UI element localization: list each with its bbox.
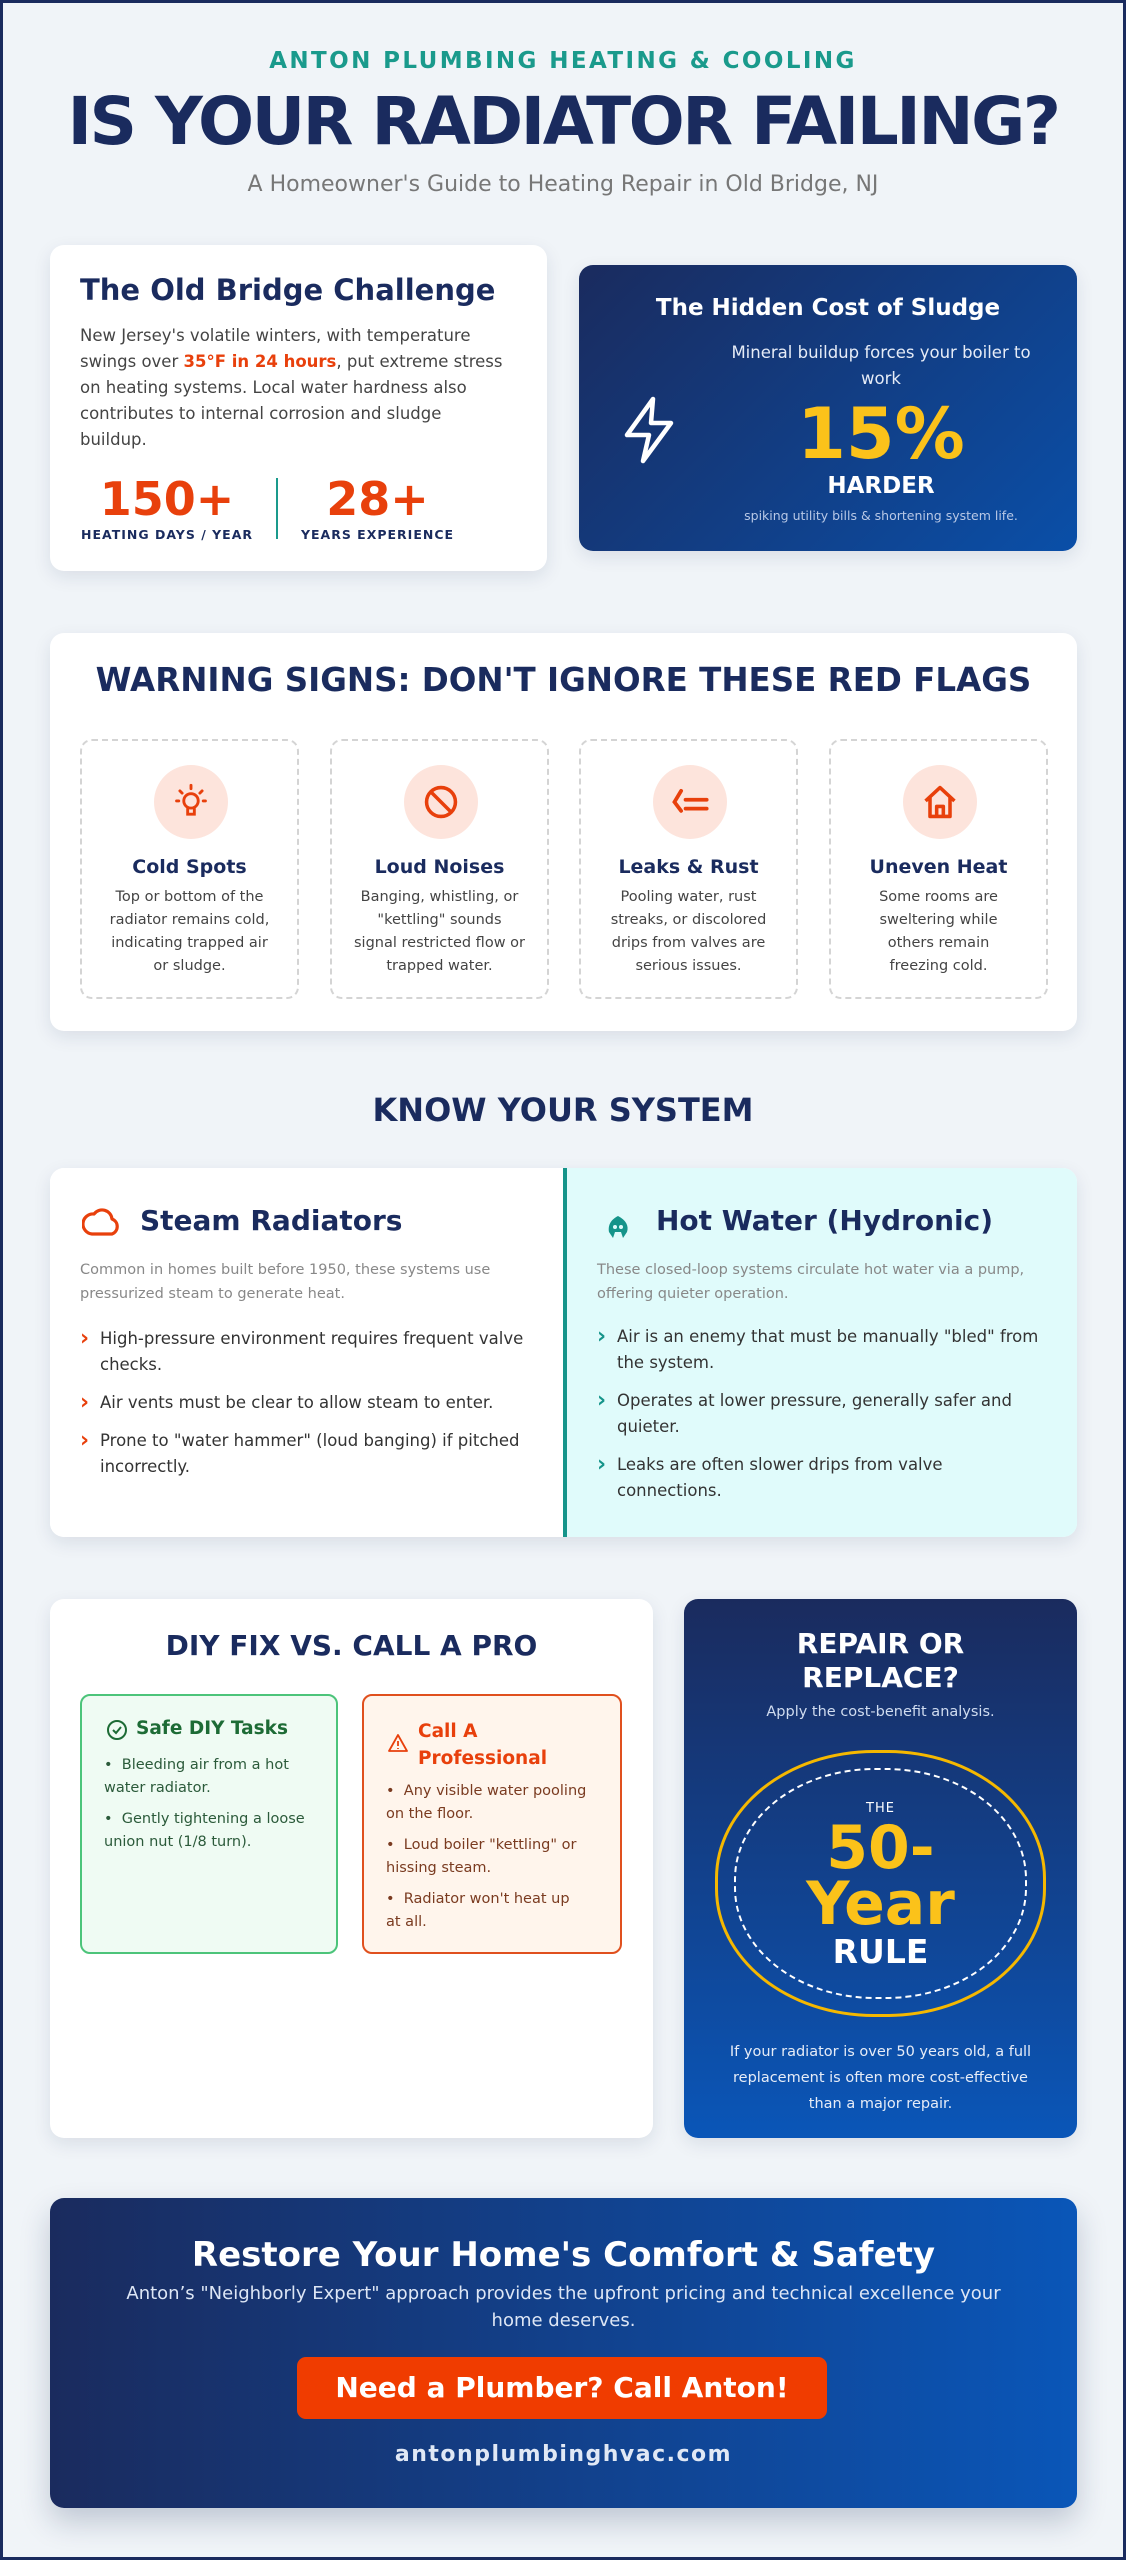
stat text: Mineral buildup forces your boiler to work xyxy=(731,343,1031,388)
sign: loud noises: Banging, whistling, or "kettling" sounds signal restricted flow or trapped water. xyxy=(354,889,525,974)
list xyxy=(104,1757,305,1850)
bullet list: High-pressure environment requires frequent valve checks. xyxy=(100,1329,523,1374)
panel: repair or replace xyxy=(684,1599,1077,2138)
panel: DIY vs pro xyxy=(50,1599,653,2138)
heading: Hot Water (Hydronic) xyxy=(656,1204,993,1237)
heading: Restore Your Home's Comfort & Safety xyxy=(192,2235,935,2275)
box: safe DIY xyxy=(80,1694,338,1954)
icon: cloud xyxy=(82,1208,119,1236)
sign: leaks & rust xyxy=(579,739,798,999)
stat: heating days xyxy=(81,472,253,542)
bullet list xyxy=(82,1329,523,1476)
panel: warning signs xyxy=(50,633,1077,1031)
badge: 50-year rule: RULE xyxy=(833,1932,928,1971)
stat: heating days: 150+ xyxy=(100,472,234,526)
heading: The Hidden Cost of Sludge xyxy=(656,295,1000,321)
sign: leaks & rust: Pooling water, rust streaks, or discolored drips from valves are serious issues. xyxy=(611,889,766,974)
sign: loud noises: Loud Noises xyxy=(375,856,504,878)
sign: cold spots xyxy=(80,739,299,999)
bullet list: Leaks are often slower drips from valve connections. xyxy=(617,1455,943,1500)
sign: uneven heat xyxy=(829,739,1048,999)
bullet list xyxy=(599,1327,1038,1500)
icon: bulb xyxy=(154,765,228,839)
box: safe DIY: Safe DIY Tasks xyxy=(136,1718,288,1739)
heading: DIY FIX VS. CALL A PRO xyxy=(166,1629,537,1662)
description: These closed-loop systems circulate hot water via a pump, offering quieter operation. xyxy=(597,1262,1024,1302)
sign: uneven heat: Some rooms are sweltering while others remain freezing cold. xyxy=(879,889,998,974)
website: antonplumbinghvac.com xyxy=(395,2442,732,2467)
box: call a pro xyxy=(362,1694,622,1954)
badge: 50-year rule: 50- xyxy=(826,1813,935,1883)
list: • Any visible water pooling on the floor. xyxy=(386,1783,586,1822)
heading: Steam Radiators xyxy=(140,1204,402,1237)
sign: leaks & rust: Leaks & Rust xyxy=(618,856,759,878)
stat: years experience xyxy=(300,472,454,542)
hot water column xyxy=(563,1168,1077,1537)
stat: years experience: 28+ xyxy=(326,472,429,526)
button: Need a Plumber? Call Anton! xyxy=(335,2371,789,2404)
sign: loud noises xyxy=(330,739,549,999)
description: Anton’s "Neighborly Expert" approach provides the upfront pricing and technical excellence your home deserves. xyxy=(126,2283,1001,2331)
description: If your radiator is over 50 years old, a full replacement is often more cost-effective than a major repair. xyxy=(730,2044,1031,2112)
panel: old bridge challenge xyxy=(50,245,547,571)
box: call a pro: Professional xyxy=(418,1748,547,1769)
bullet list: Operates at lower pressure, generally safer and quieter. xyxy=(617,1391,1012,1436)
heading xyxy=(797,1627,964,1694)
list: • Bleeding air from a hot water radiator. xyxy=(104,1757,289,1796)
icon: house xyxy=(903,765,977,839)
list: • Loud boiler "kettling" or hissing steam. xyxy=(386,1837,576,1876)
subheading: Apply the cost-benefit analysis. xyxy=(766,1704,995,1720)
icon: warning xyxy=(388,1734,408,1752)
panel: systems comparison xyxy=(50,1168,1077,1537)
stat text: HARDER xyxy=(827,473,935,499)
sign: cold spots: Cold Spots xyxy=(132,856,247,878)
brand name: ANTON PLUMBING HEATING & COOLING xyxy=(269,48,857,74)
stat text: spiking utility bills & shortening system life. xyxy=(744,508,1018,523)
badge: 50-year rule: THE xyxy=(866,1801,895,1816)
sign: cold spots: Top or bottom of the radiator remains cold, indicating trapped air or sludge. xyxy=(110,889,269,974)
body text: New Jersey's volatile winters, with temperature swings over 35°F in 24 hours, put extreme stress on heating systems. Local water hardness also contributes to internal corrosion and sludge buildup. xyxy=(80,326,502,449)
badge: 50-year rule xyxy=(715,1750,1046,2017)
heading: REPAIR OR xyxy=(797,1627,964,1660)
steam radiators column xyxy=(50,1168,564,1537)
button xyxy=(297,2357,827,2419)
box: call a pro: Call A xyxy=(418,1721,478,1742)
panel: hidden cost of sludge xyxy=(579,265,1077,551)
sign: uneven heat: Uneven Heat xyxy=(870,856,1007,878)
stat text xyxy=(731,343,1031,523)
heading: REPLACE? xyxy=(802,1661,959,1694)
warning heading: WARNING SIGNS: DON'T IGNORE THESE RED FLAGS xyxy=(96,661,1031,699)
subtitle: A Homeowner's Guide to Heating Repair in Old Bridge, NJ xyxy=(248,172,878,197)
title: IS YOUR RADIATOR FAILING? xyxy=(67,83,1059,160)
stat: heating days: HEATING DAYS / YEAR xyxy=(81,527,253,542)
icon: check xyxy=(107,1720,127,1740)
icon: water xyxy=(608,1216,628,1238)
icon: leak pipe xyxy=(653,765,727,839)
list: • Radiator won't heat up at all. xyxy=(386,1891,570,1930)
bullet list: Prone to "water hammer" (loud banging) if pitched incorrectly. xyxy=(100,1431,520,1476)
description: Common in homes built before 1950, these systems use pressurized steam to generate heat. xyxy=(80,1262,490,1302)
heading: The Old Bridge Challenge xyxy=(80,273,495,307)
icon: no sound xyxy=(404,765,478,839)
list xyxy=(386,1783,586,1930)
bullet list: Air is an enemy that must be manually "bled" from the system. xyxy=(617,1327,1038,1372)
bullet list: Air vents must be clear to allow steam to enter. xyxy=(100,1393,493,1412)
call to action panel xyxy=(50,2198,1077,2508)
icon: lightning bolt xyxy=(624,396,674,464)
list: • Gently tightening a loose union nut (1/8 turn). xyxy=(104,1811,305,1850)
stat: years experience: YEARS EXPERIENCE xyxy=(301,527,454,542)
section heading: know your system: KNOW YOUR SYSTEM xyxy=(372,1091,754,1129)
stat text: 15% xyxy=(797,393,965,475)
badge: 50-year rule: Year xyxy=(806,1869,955,1939)
